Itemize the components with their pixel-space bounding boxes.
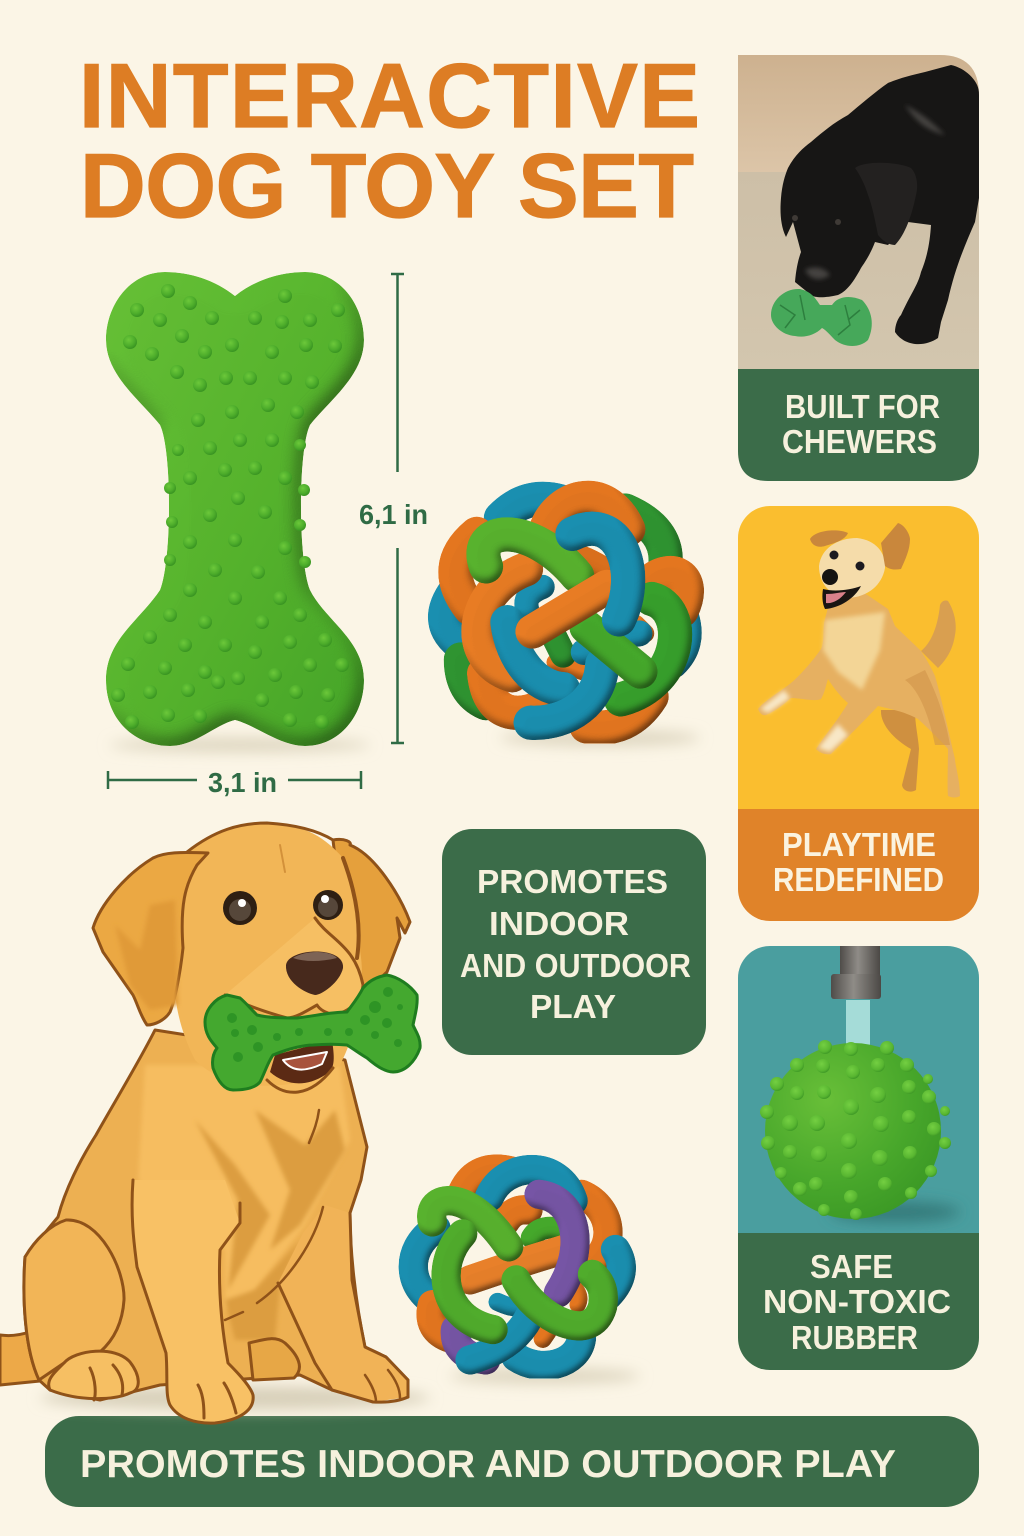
panel: playtime redefined: PLAYTIME [782, 826, 936, 863]
title [79, 46, 700, 237]
head [174, 823, 362, 1086]
panel: promotes indoor and outdoor play: INDOOR [489, 905, 629, 942]
title: DOG TOY SET [80, 136, 694, 237]
chest fur light [138, 1065, 350, 1310]
nose [286, 952, 343, 995]
panel: built for chewers [738, 55, 979, 481]
icon: green spiked bone toy [106, 272, 370, 752]
head [819, 538, 885, 598]
shadow under large ball [500, 730, 700, 746]
photo: jumping golden dog [758, 523, 960, 798]
panel: built for chewers: BUILT FOR [785, 388, 940, 425]
panel: promotes indoor and outdoor play: PLAY [530, 988, 616, 1025]
back thigh [24, 1220, 124, 1380]
panel: playtime redefined: REDEFINED [773, 861, 944, 898]
right ear [333, 839, 410, 1000]
panel: safe non-toxic rubber: RUBBER [791, 1319, 918, 1356]
shadow under small ball [450, 1368, 640, 1384]
width dimension: 3,1 in [108, 767, 361, 798]
torso [24, 1030, 408, 1400]
mouth [270, 1040, 334, 1083]
far hind leg [881, 710, 919, 792]
panel: safe non-toxic rubber [738, 946, 979, 1370]
left ear [93, 853, 208, 1025]
panel: promotes indoor and outdoor play [442, 829, 706, 1055]
front leg right [278, 1205, 408, 1402]
title: INTERACTIVE [79, 46, 700, 147]
panel: promotes indoor and outdoor play: PROMOTES [477, 863, 668, 900]
fur shading [195, 1110, 345, 1340]
icon: faucet and water [831, 946, 881, 1045]
toy in photo [771, 289, 872, 346]
bottom banner: PROMOTES INDOOR AND OUTDOOR PLAY [80, 1443, 896, 1486]
icon: spiked green ball [760, 1040, 960, 1222]
back left paw [49, 1351, 138, 1399]
photo: black labrador with toy [771, 65, 979, 346]
height dimension: 6,1 in [359, 274, 428, 743]
icon: woven rubber ball, small [413, 1169, 621, 1365]
panel: built for chewers: CHEWERS [782, 423, 937, 460]
icon: woven rubber ball, large [445, 498, 690, 728]
tail [921, 600, 956, 668]
bottom banner [45, 1416, 979, 1507]
back right paw [249, 1339, 299, 1380]
height dimension: 6,1 in: 6,1 in [359, 499, 428, 530]
front leg left [132, 1180, 253, 1423]
tail [0, 1332, 50, 1385]
eyes [223, 891, 257, 925]
icon: golden retriever holding bone [0, 823, 430, 1423]
brows and muzzle [225, 918, 363, 1018]
panel: playtime redefined [738, 506, 979, 921]
panel: safe non-toxic rubber: NON-TOXIC [763, 1283, 951, 1320]
panel: safe non-toxic rubber: SAFE [810, 1248, 893, 1285]
body [758, 590, 960, 798]
green bone in mouth [205, 975, 420, 1090]
panel: promotes indoor and outdoor play: AND OUTDOOR [460, 947, 691, 984]
width dimension: 3,1 in: 3,1 in [208, 767, 277, 798]
